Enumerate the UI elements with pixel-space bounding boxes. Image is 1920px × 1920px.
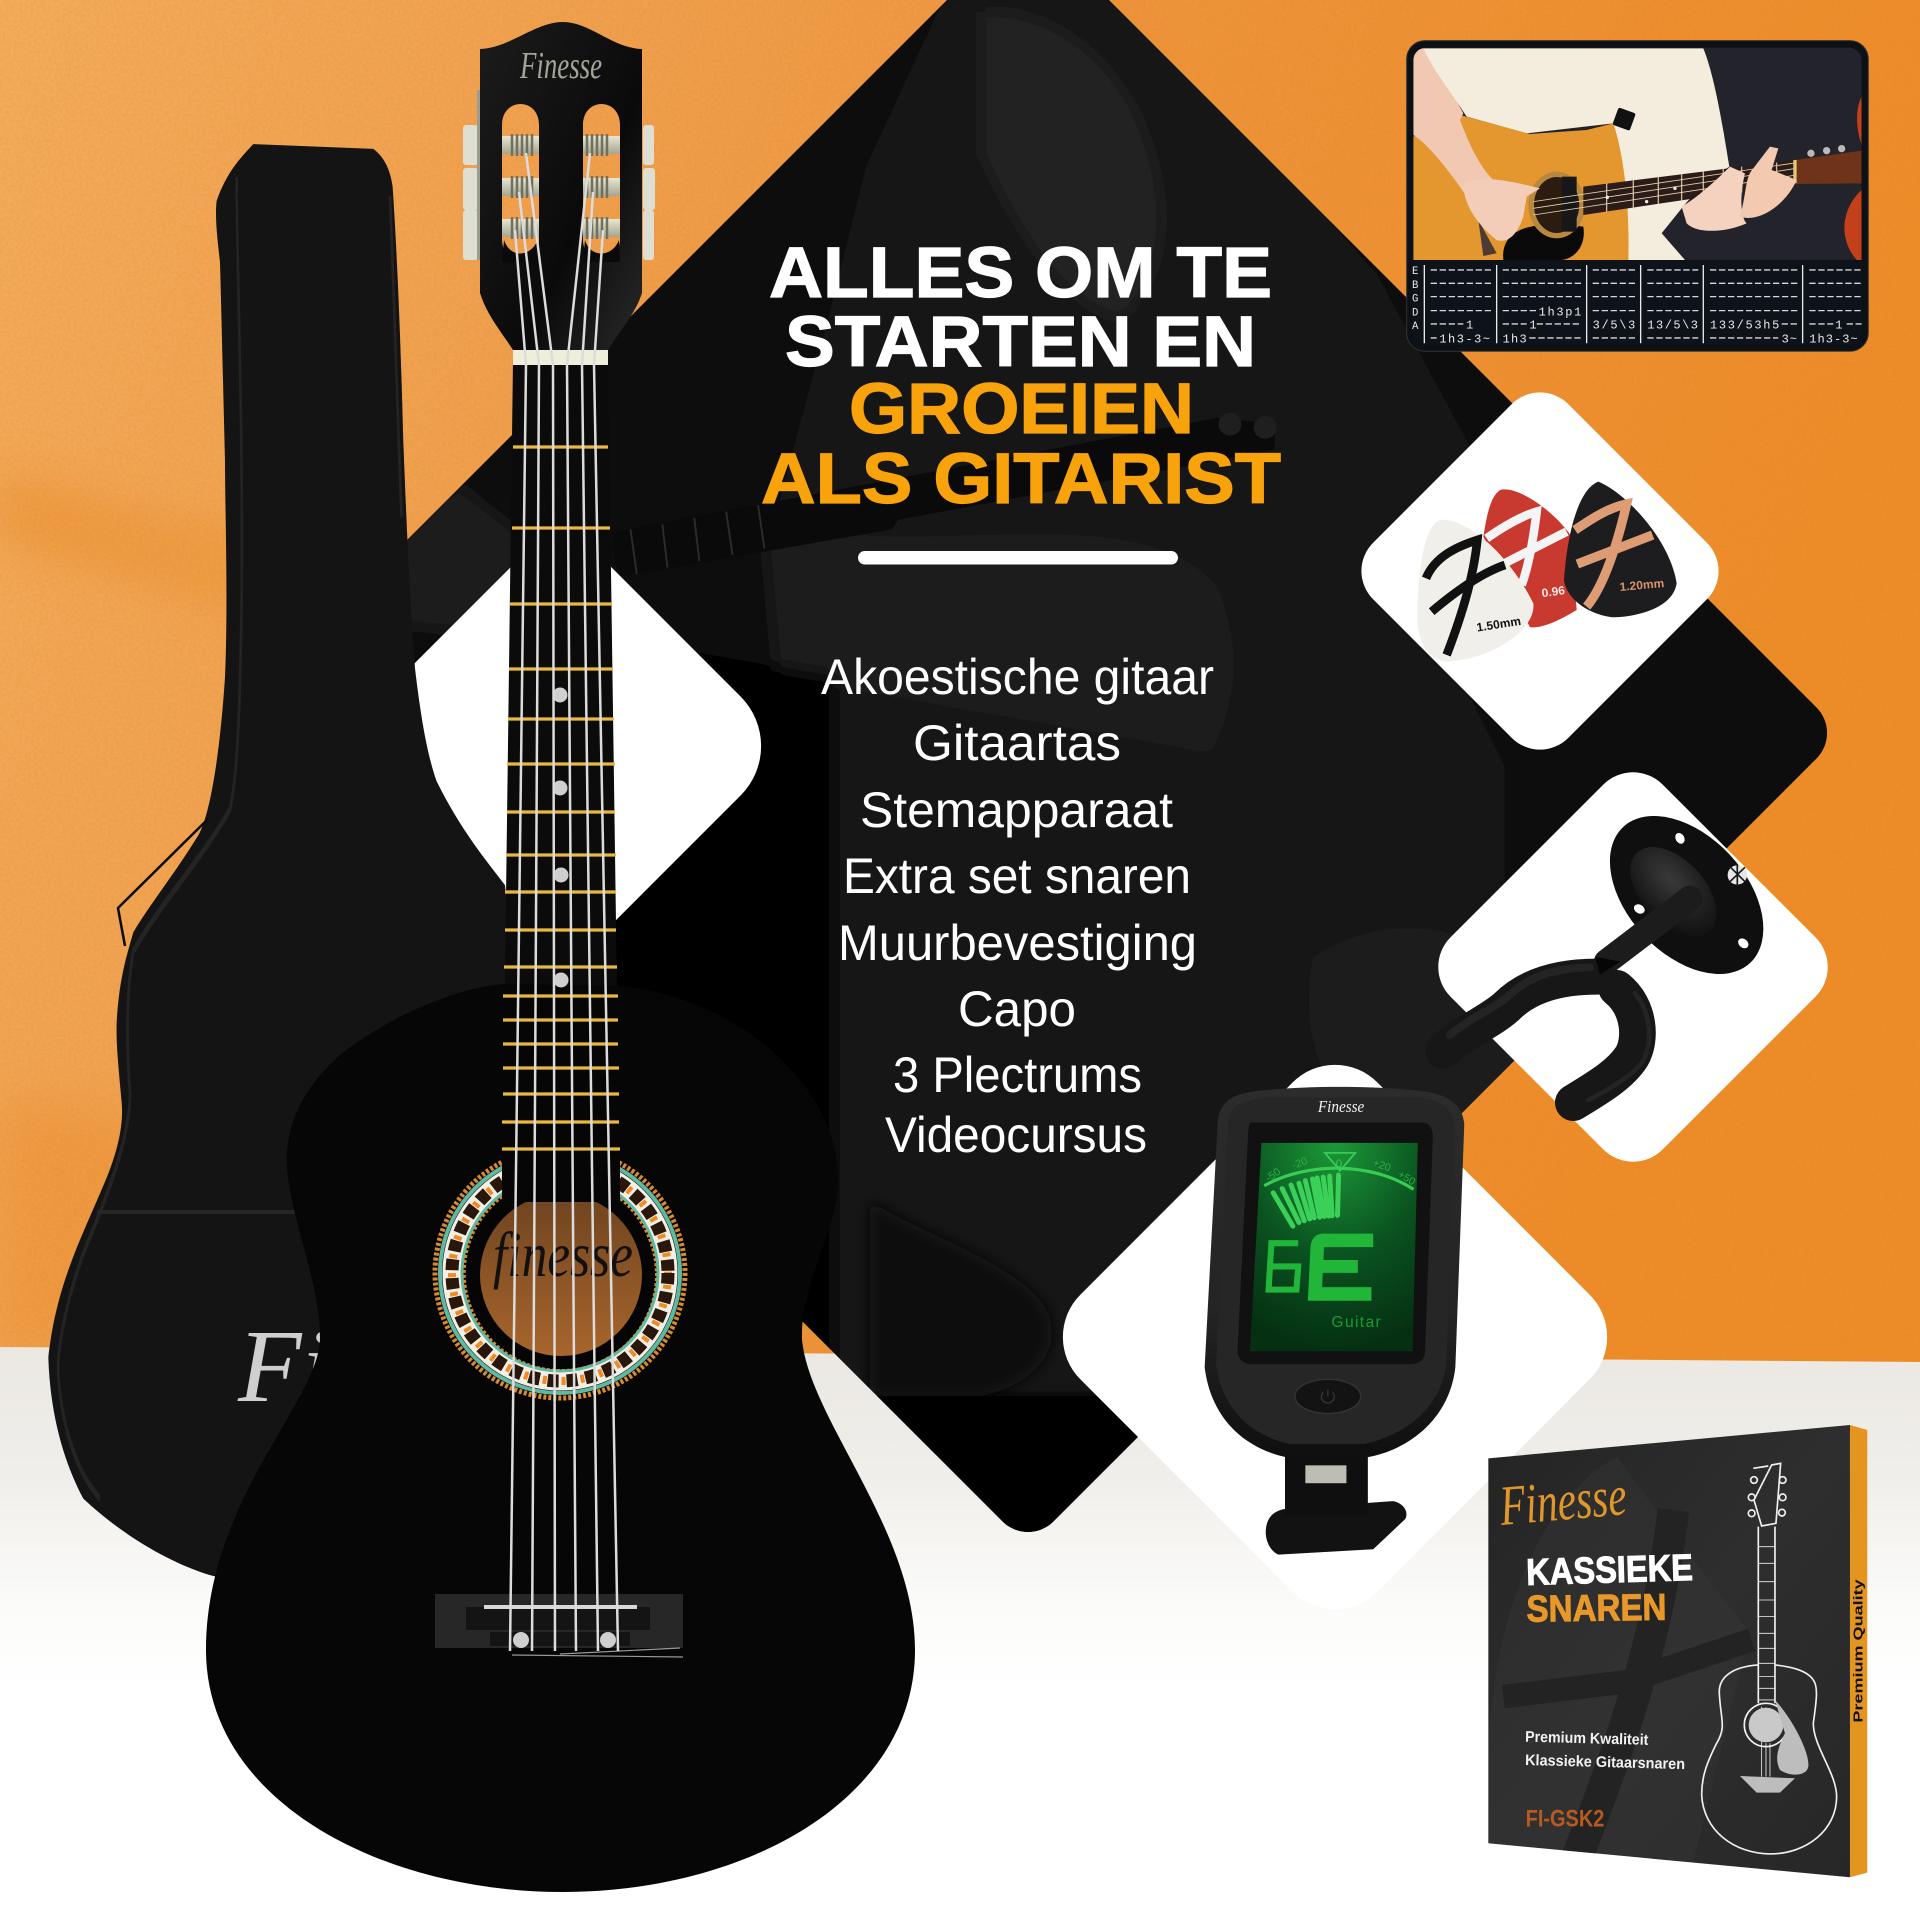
white diamond: wall mount: [1421, 755, 1845, 1179]
picks: 0.96: [1541, 583, 1566, 600]
tuner foot and clip: [1266, 1501, 1406, 1555]
box title: SNAREN: [1526, 1586, 1667, 1630]
gig bag: [48, 144, 540, 1610]
white diamond: picks: [1345, 376, 1735, 766]
box subtitle: Premium Kwaliteit: [1525, 1729, 1649, 1749]
text block: contents list: Muurbevestiging: [838, 915, 1197, 971]
box front: [1488, 1425, 1850, 1877]
guitar tuner plates left and right: [463, 90, 655, 260]
guitar tab notation: 133/53h5: [1710, 319, 1779, 333]
watermark F on box: [1504, 1511, 1755, 1854]
heading: STARTEN EN: [785, 303, 1256, 382]
tuner device: [1205, 1087, 1464, 1555]
guitar tab notation: 1h3p1: [1539, 305, 1581, 319]
background: orange textured wall: [0, 0, 1920, 1380]
tuner scale: -20: [1290, 1155, 1309, 1172]
box orange side with label: [1850, 1425, 1867, 1877]
bridge: [435, 1594, 683, 1657]
strings package box: Klassieke Gitaarsnaren: [1525, 1752, 1685, 1773]
bag seam stitching: [58, 177, 402, 1499]
tuner logo: Finesse: [1317, 1097, 1364, 1116]
tuner scale: [1263, 1153, 1417, 1226]
strings: [510, 153, 618, 1651]
red pick: [1483, 489, 1577, 627]
bag logo: Fi: [237, 1309, 330, 1424]
guitar tab notation: D: [1412, 307, 1418, 319]
tuner scale: 0: [1336, 1158, 1342, 1170]
wall mount: [1443, 787, 1793, 1103]
tuner power button: [1295, 1379, 1361, 1414]
guitar body: [206, 984, 915, 1892]
picks: 1.20mm: [1619, 576, 1665, 594]
box title: [1526, 1546, 1693, 1630]
box product code: FI-GSK2: [1526, 1806, 1604, 1833]
guitar tab notation: 1: [1835, 319, 1842, 333]
left yoke arm: [1443, 977, 1597, 1051]
heading: ALLES OM TE: [769, 234, 1272, 313]
tuner readout 6E: [1269, 1240, 1373, 1294]
guitar tab notation: 1: [1466, 319, 1473, 333]
headstock logo: Finesse: [519, 45, 602, 87]
tuner green screen: [1250, 1143, 1418, 1351]
bag strap loop: [118, 819, 208, 946]
text block: contents list: Videocursus: [885, 1107, 1147, 1163]
black pick: [1564, 482, 1677, 617]
divider rule: [858, 551, 1178, 564]
heading: ALS GITARIST: [761, 440, 1281, 519]
guitar tab notation: 1h3-3~: [1809, 332, 1858, 346]
heading: GROEIEN: [849, 370, 1194, 449]
photo: guitar neck in background: [611, 413, 1277, 577]
guitar tab notation: 1h3-3~: [1439, 332, 1490, 346]
text block: contents list: Akoestische gitaar: [821, 649, 1214, 705]
video course tablet: [1407, 41, 1868, 351]
tuner scale: +20: [1371, 1157, 1392, 1174]
background: white floor: [0, 1347, 1920, 1920]
guitar tab notation: 3~: [1782, 332, 1797, 346]
tuner display bezel: [1237, 1122, 1433, 1364]
text block: contents list: Gitaartas: [913, 715, 1121, 771]
box logo: Finesse: [1497, 1465, 1629, 1538]
guitar tab notation: 3/5\3: [1593, 319, 1635, 333]
picks: 1.50mm: [1476, 614, 1522, 635]
panel: black diamond with dark guitarist photo: [407, 0, 1827, 1532]
guitar headstock: [480, 22, 642, 370]
strings package box: [1488, 1425, 1867, 1877]
tuning posts and coils: [502, 134, 620, 262]
photo lower shoe silhouette: [870, 1200, 1052, 1396]
box title: KASSIEKE: [1526, 1546, 1693, 1593]
fretboard lower end over rosette: [502, 1130, 620, 1202]
rosette and sound hole: [435, 1148, 685, 1398]
mount plate: [1580, 787, 1793, 1003]
guitar tab notation: 1h3: [1503, 332, 1527, 346]
picks: [1417, 482, 1677, 662]
box guitar line drawing: [1702, 1463, 1837, 1854]
text block: contents list: 3 Plectrums: [893, 1047, 1142, 1103]
text block: contents list: Capo: [958, 981, 1076, 1037]
video still of guitarist: [1413, 48, 1862, 260]
right yoke arm: [1573, 988, 1637, 1103]
heading: [761, 234, 1281, 519]
white diamond: tuner: [1038, 1040, 1632, 1634]
strings package box: Premium Quality: [1852, 1579, 1866, 1723]
sound hole script label: finesse: [493, 1219, 633, 1290]
tuner housing: [1205, 1087, 1464, 1457]
text block: contents list: Stemapparaat: [860, 782, 1173, 838]
tuner scale: -50: [1263, 1166, 1283, 1185]
bag zipper: [97, 1210, 300, 1214]
frets: [502, 447, 620, 1149]
guitar tab notation: [1412, 261, 1862, 346]
guitar fretboard: [502, 360, 620, 1205]
white pick: [1417, 520, 1533, 662]
nut: [513, 350, 608, 365]
guitar: [206, 22, 915, 1892]
text block: contents list: [821, 649, 1214, 1163]
guitar tab notation: 13/5\3: [1647, 319, 1698, 333]
guitar tab notation: G: [1412, 294, 1418, 306]
text block: contents list: Extra set snaren: [843, 848, 1191, 904]
photo: guitarist in dark greyscale: [408, 0, 1827, 1402]
tuner scale: +50: [1396, 1168, 1417, 1188]
guitar tab notation: 1: [1529, 319, 1537, 333]
fret position dots: [552, 688, 568, 988]
guitar tab notation: E: [1412, 266, 1418, 278]
white diamond behind guitar neck: [332, 517, 790, 975]
mount arm: [1607, 898, 1690, 962]
guitar tab notation: B: [1412, 280, 1418, 292]
guitar tab notation: A: [1412, 321, 1419, 333]
tuner mode label: Guitar: [1331, 1314, 1381, 1331]
